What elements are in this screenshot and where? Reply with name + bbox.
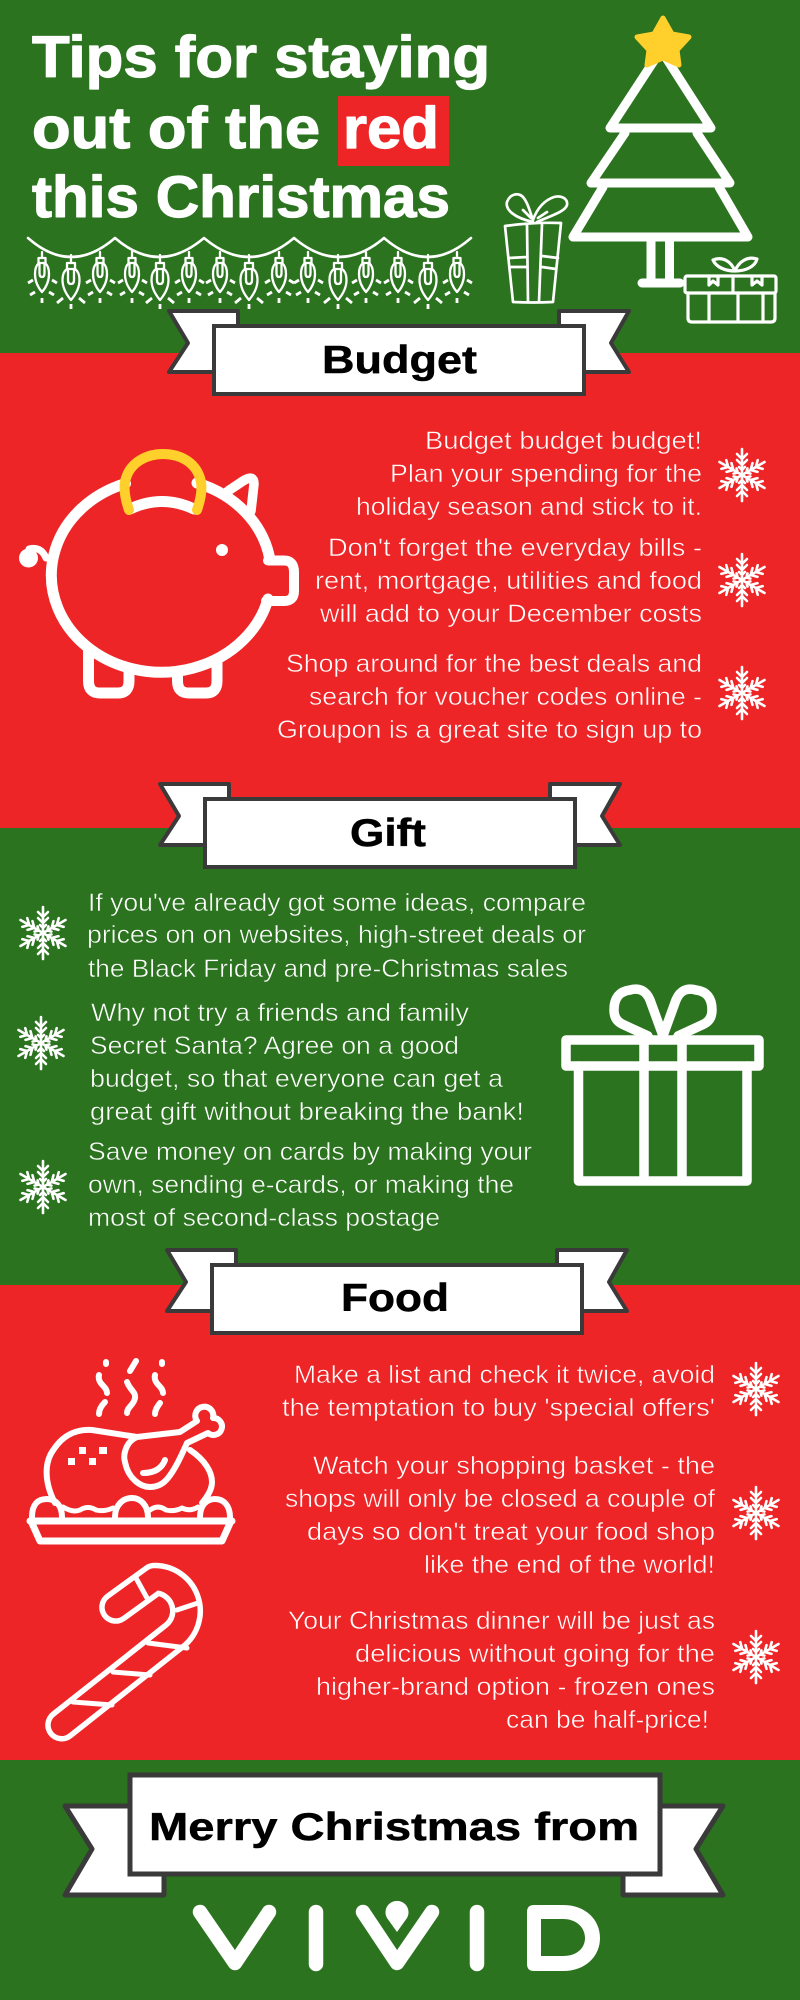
banner: Gift: Gift: [350, 812, 426, 855]
icon: snowflake: [731, 1487, 781, 1539]
text block: gift tips: If you've already got some ideas, compare: [88, 889, 586, 917]
background: gift green band: [0, 828, 800, 1285]
text block: budget tips: rent, mortgage, utilities and food: [315, 567, 702, 595]
text block: food tips: higher-brand option - frozen ones: [316, 1673, 715, 1701]
icon: star: [637, 18, 689, 65]
icon: tall gift box: [505, 194, 567, 302]
background: footer green band: [0, 1760, 800, 2000]
banner: Budget: [169, 311, 629, 394]
icon: string of fairy lights: [28, 238, 472, 309]
icon: snowflake: [717, 449, 767, 501]
icon: christmas tree with star: [573, 18, 748, 283]
title: Tips for staying: [32, 25, 490, 90]
text block: budget tips: Budget budget budget!: [425, 427, 702, 455]
icon: small gift box: [685, 258, 776, 322]
icon: snowflake: [717, 667, 767, 719]
text block: gift tips: Why not try a friends and family: [91, 999, 470, 1027]
text block: budget tips: Shop around for the best deals and: [286, 650, 702, 678]
icon: piggy bank: [19, 454, 294, 693]
text block: food tips: Your Christmas dinner will be just as: [288, 1607, 715, 1635]
text block: budget tips: [277, 427, 702, 744]
text block: food tips: Make a list and check it twice, avoid: [294, 1361, 715, 1389]
text block: gift tips: prices on on websites, high-street deals or: [87, 921, 586, 949]
logo: VIVID: [200, 1901, 600, 1971]
icon: snowflake: [731, 1631, 781, 1683]
text block: gift tips: budget, so that everyone can get a: [90, 1065, 503, 1093]
text block: gift tips: great gift without breaking the bank!: [90, 1098, 524, 1126]
icon: snowflake: [16, 1017, 66, 1069]
icon: candy cane: [62, 1578, 198, 1725]
text block: food tips: can be half-price!: [506, 1706, 709, 1734]
text block: budget tips: will add to your December costs: [319, 600, 702, 628]
text block: budget tips: Groupon is a great site to sign up to: [277, 716, 702, 744]
title highlight: red: red: [343, 96, 439, 161]
text block: budget tips: holiday season and stick to it.: [356, 493, 702, 521]
icon: logo droplet: [386, 1901, 409, 1932]
icon: tray: [30, 1521, 232, 1541]
background: top green band: [0, 0, 800, 353]
text block: budget tips: Plan your spending for the: [390, 460, 702, 488]
text block: food tips: [282, 1361, 715, 1734]
icon: snowflake: [18, 907, 68, 959]
icon: seasoning dots: [68, 1447, 107, 1465]
icon: gift box: [566, 989, 759, 1181]
icon: snowflake: [731, 1363, 781, 1415]
icon: snowflake: [717, 554, 767, 606]
text block: food tips: delicious without going for the: [355, 1640, 715, 1668]
text block: food tips: Watch your shopping basket - the: [313, 1452, 715, 1480]
text block: budget tips: search for voucher codes online -: [309, 683, 702, 711]
banner: Food: [167, 1250, 627, 1333]
title: out of the: [32, 96, 320, 161]
banner: Gift: [160, 784, 620, 867]
background: budget red band: [0, 353, 800, 828]
title: [32, 25, 490, 230]
icon: roast turkey on a tray: [30, 1361, 232, 1541]
icon: snowflake: [18, 1161, 68, 1213]
text block: food tips: shops will only be closed a couple of: [285, 1485, 715, 1513]
text block: budget tips: Don't forget the everyday bills -: [328, 534, 702, 562]
text block: food tips: like the end of the world!: [424, 1551, 715, 1579]
banner: Merry Christmas from: [65, 1775, 723, 1895]
banner: Budget: Budget: [322, 339, 477, 382]
text block: gift tips: Save money on cards by making your: [88, 1138, 532, 1166]
text block: gift tips: the Black Friday and pre-Christmas sales: [88, 955, 568, 983]
background: food red band: [0, 1285, 800, 1760]
text block: gift tips: [87, 889, 586, 1232]
banner: Food: Food: [341, 1277, 449, 1320]
text block: gift tips: Secret Santa? Agree on a good: [90, 1032, 459, 1060]
text block: food tips: days so don't treat your food shop: [307, 1518, 715, 1546]
title: this Christmas: [32, 165, 450, 230]
text block: gift tips: most of second-class postage: [88, 1204, 440, 1232]
icon: steam: [99, 1361, 163, 1414]
banner: Merry Christmas from: Merry Christmas from: [149, 1806, 639, 1849]
text block: gift tips: own, sending e-cards, or making the: [88, 1171, 514, 1199]
text block: food tips: the temptation to buy 'special offers': [282, 1394, 715, 1422]
